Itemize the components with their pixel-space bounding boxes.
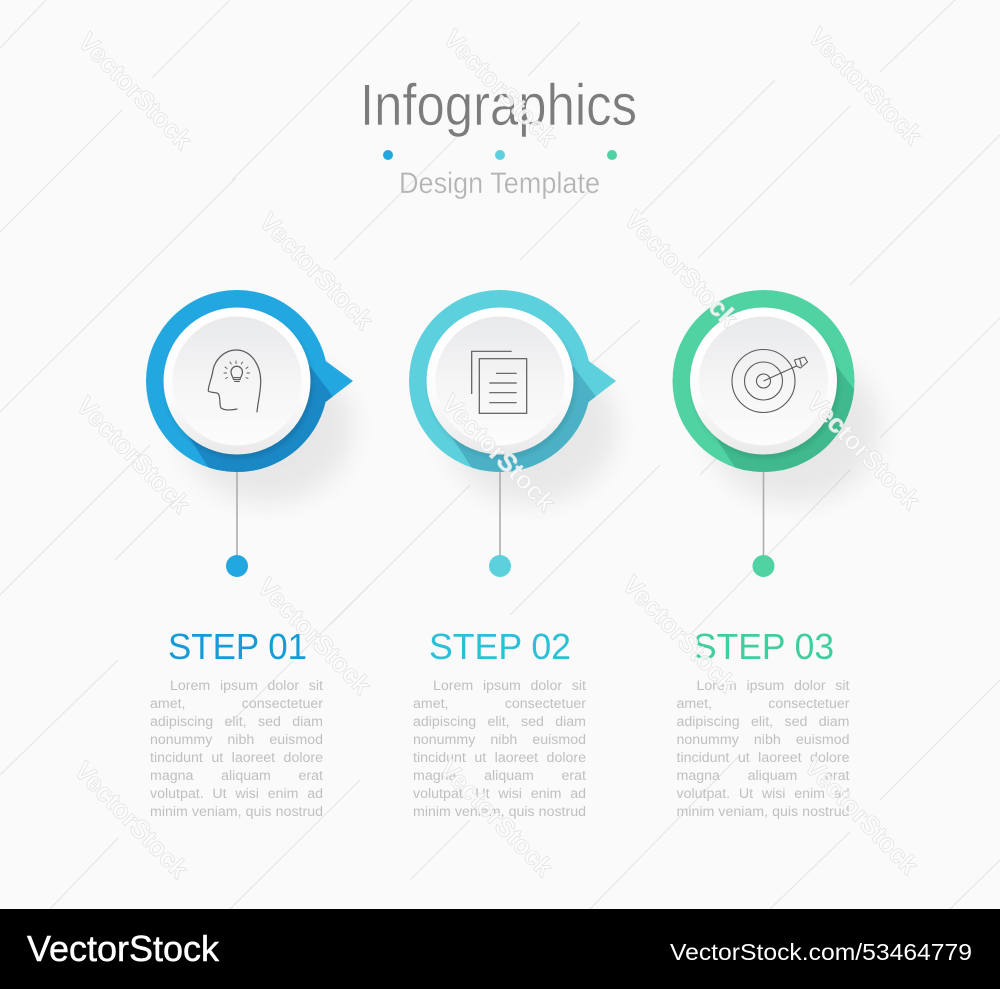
- text block: step 3: nonummy nibh euismod: [676, 732, 850, 748]
- stem and dot: step 3: [752, 472, 774, 577]
- heading: step 02: STEP 02: [429, 626, 571, 667]
- step 1 badge: [146, 290, 355, 503]
- text block: step 2: Lorem ipsum dolor sit: [433, 678, 586, 694]
- text block: step 1: minim veniam, quis nostrud: [150, 804, 323, 820]
- watermark overlay: VectorStock: [433, 753, 560, 883]
- text block: step 1: Lorem ipsum dolor sit: [170, 678, 323, 694]
- watermark overlay: VectorStock: [70, 390, 197, 520]
- text block: step 3: [676, 678, 850, 820]
- text block: step 1: magna aliquam erat: [150, 768, 323, 784]
- text block: step 2: volutpat. Ut wisi enim ad: [413, 786, 586, 802]
- watermark overlay: VectorStock: [68, 755, 195, 885]
- subtitle: Design Template: [399, 167, 600, 200]
- text block: step 3: volutpat. Ut wisi enim ad: [676, 786, 850, 802]
- text block: step 1: tincidunt ut laoreet dolore: [150, 750, 323, 766]
- watermark overlay: VectorStock: [251, 571, 378, 701]
- title dot: blue: [383, 150, 393, 160]
- text block: step 1: volutpat. Ut wisi enim ad: [150, 786, 323, 802]
- step 2 badge: [409, 290, 618, 503]
- text block: step 3: Lorem ipsum dolor sit: [696, 678, 850, 694]
- title: Infographics: [360, 73, 637, 138]
- watermark overlay: VectorStock: [616, 569, 743, 699]
- stem and dot: step 2: [489, 472, 511, 577]
- text block: step 3: tincidunt ut laoreet dolore: [676, 750, 850, 766]
- text block: step 1: nonummy nibh euismod: [150, 732, 323, 748]
- icon: documents: [472, 351, 527, 413]
- text block: step 2: adipiscing elit, sed diam: [413, 714, 586, 730]
- watermark overlay: VectorStock: [802, 21, 929, 151]
- text block: step 3: magna aliquam erat: [676, 768, 850, 784]
- watermark overlay: VectorStock: [253, 206, 380, 336]
- text block: step 2: amet, consectetuer: [413, 696, 586, 712]
- footer url: VectorStock.com/53464779: [670, 939, 972, 965]
- title dot: teal: [495, 150, 505, 160]
- watermark overlay: VectorStock: [72, 26, 199, 156]
- watermark overlay: VectorStock: [800, 386, 927, 516]
- watermark overlay: VectorStock: [437, 23, 564, 153]
- watermark overlay: VectorStock: [618, 204, 745, 334]
- icon: target with arrow: [732, 350, 808, 412]
- text block: step 2: magna aliquam erat: [413, 768, 586, 784]
- text block: step 2: tincidunt ut laoreet dolore: [413, 750, 586, 766]
- heading: step 01: STEP 01: [168, 626, 307, 667]
- text block: step 3: amet, consectetuer: [676, 696, 850, 712]
- text block: step 2: minim veniam, quis nostrud: [413, 804, 586, 820]
- watermark overlay: VectorStock: [798, 751, 925, 881]
- watermark overlay: [68, 21, 929, 885]
- text block: step 3: minim veniam, quis nostrud: [676, 804, 850, 820]
- text block: step 1: adipiscing elit, sed diam: [150, 714, 323, 730]
- text block: step 1: [150, 678, 323, 820]
- footer logo: VectorStock: [27, 928, 220, 969]
- text block: step 3: adipiscing elit, sed diam: [676, 714, 850, 730]
- stem and dot: step 1: [226, 472, 248, 577]
- text block: step 2: nonummy nibh euismod: [413, 732, 586, 748]
- icon: head with light bulb: [208, 350, 261, 412]
- footer bar: [0, 909, 1000, 989]
- text block: step 1: amet, consectetuer: [150, 696, 323, 712]
- text block: step 2: [413, 678, 586, 820]
- step 3 badge: [672, 290, 882, 503]
- title dot: green: [607, 150, 617, 160]
- heading: step 03: STEP 03: [693, 626, 834, 667]
- watermark overlay: VectorStock: [435, 388, 562, 518]
